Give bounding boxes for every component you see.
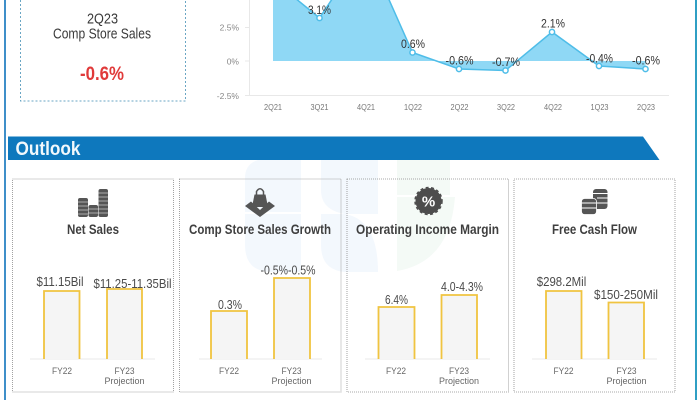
line chart: comp store sales by quarter: 1Q22	[404, 102, 422, 112]
line chart: comp store sales by quarter: 2Q21	[264, 102, 282, 112]
panel: Net Sales	[12, 179, 174, 392]
line chart: comp store sales by quarter: 2Q23	[637, 102, 655, 112]
icon: percent badge: %	[422, 194, 435, 210]
line chart: comp store sales by quarter: 3.1%	[308, 3, 331, 17]
panel: Comp Store Sales Growth: Projection	[272, 376, 312, 386]
line chart: comp store sales by quarter: -0.7%	[492, 55, 520, 69]
panel: Net Sales: $11.15Bil	[36, 275, 84, 289]
line chart: comp store sales by quarter: 0%	[227, 56, 239, 66]
icon: coin stacks	[78, 189, 108, 217]
panel: 2Q23 comp store sales	[20, 0, 186, 101]
panel: Free Cash Flow: $298.2Mil	[537, 275, 586, 289]
line chart: comp store sales by quarter: 0.6%	[401, 37, 425, 51]
panel: Comp Store Sales Growth: FY22	[219, 366, 239, 376]
panel: Comp Store Sales Growth: FY23	[282, 366, 302, 376]
line chart: comp store sales by quarter: 1Q23	[590, 102, 609, 112]
line chart: comp store sales by quarter	[217, 0, 669, 112]
panel: Net Sales: FY23	[114, 366, 134, 376]
panel: Free Cash Flow: Projection	[606, 376, 646, 386]
line chart: comp store sales by quarter: 2.1%	[541, 16, 565, 30]
line chart: comp store sales by quarter: -0.6%	[632, 54, 660, 68]
panel: Operating Income Margin: FY23	[449, 366, 469, 376]
watermark logo	[245, 160, 455, 272]
panel: Free Cash Flow: FY23	[616, 366, 636, 376]
panel: Operating Income Margin: Operating Income Margin	[356, 221, 499, 237]
panel: Operating Income Margin	[347, 179, 508, 392]
panel: 2Q23 comp store sales: Comp Store Sales	[53, 26, 151, 42]
panel: Free Cash Flow: Free Cash Flow	[552, 221, 637, 237]
panel: Net Sales: Net Sales	[67, 221, 119, 237]
line chart: comp store sales by quarter: 4Q22	[544, 102, 562, 112]
line chart: comp store sales by quarter: 3Q21	[310, 102, 329, 112]
line chart: comp store sales by quarter: 4Q21	[357, 102, 375, 112]
icon: percent badge	[415, 188, 442, 214]
panel: Operating Income Margin: FY22	[386, 366, 406, 376]
panel: Net Sales: FY22	[52, 366, 72, 376]
icon: shopping bag on platform	[245, 189, 275, 217]
line chart: comp store sales by quarter: 2.5%	[220, 22, 239, 32]
panel: Free Cash Flow	[514, 179, 675, 392]
panel: Operating Income Margin: 6.4%	[385, 293, 408, 307]
panel: Operating Income Margin: Projection	[439, 376, 479, 386]
heading: Outlook banner: Outlook	[16, 139, 81, 160]
panel: 2Q23 comp store sales: -0.6%	[80, 64, 124, 85]
line chart: comp store sales by quarter: 2Q22	[450, 102, 469, 112]
panel: Net Sales: $11.25-11.35Bil	[94, 277, 172, 291]
heading: Outlook banner	[8, 136, 660, 160]
line chart: comp store sales by quarter: -0.4%	[586, 52, 613, 66]
panel: Free Cash Flow: FY22	[554, 366, 574, 376]
panel: Comp Store Sales Growth	[180, 179, 341, 392]
panel: Comp Store Sales Growth: -0.5%-0.5%	[260, 264, 316, 278]
icon: two coin stacks	[582, 189, 608, 214]
panel: Comp Store Sales Growth: 0.3%	[218, 298, 242, 312]
panel: 2Q23 comp store sales: 2Q23	[87, 12, 118, 28]
line chart: comp store sales by quarter: -0.6%	[446, 54, 474, 68]
panel: Free Cash Flow: $150-250Mil	[594, 288, 658, 302]
panel: Comp Store Sales Growth: Comp Store Sales Growth	[189, 221, 331, 237]
line chart: comp store sales by quarter: -2.5%	[217, 91, 239, 101]
line chart: comp store sales by quarter: 3Q22	[497, 102, 515, 112]
panel: Net Sales: Projection	[104, 376, 144, 386]
panel: Operating Income Margin: 4.0-4.3%	[441, 280, 483, 294]
